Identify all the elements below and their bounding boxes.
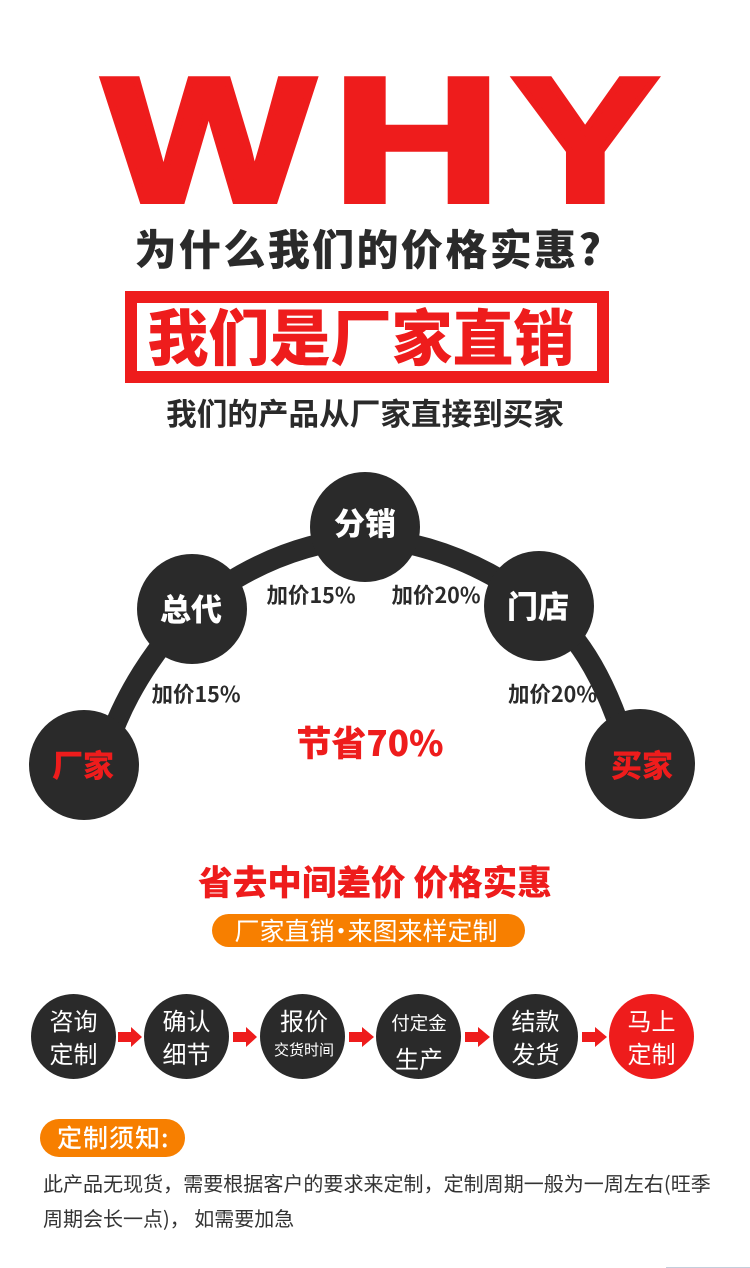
node: general agent (137, 554, 247, 664)
title: WHY: H (332, 41, 501, 239)
node: factory: 厂家 (52, 741, 114, 786)
step: confirm details: 细节 (162, 1035, 210, 1070)
step: confirm details: 确认 (162, 1002, 210, 1037)
node: general agent: 总代 (160, 585, 222, 630)
title: WHY: Y (512, 41, 658, 239)
node: store (484, 551, 594, 661)
arrow (118, 1027, 142, 1047)
heading: why our price is favourable: 为什么我们的价格实惠? (135, 217, 603, 278)
step: customise now (609, 994, 694, 1079)
node: buyer: 买家 (611, 741, 673, 786)
step: customise now: 马上 (628, 1002, 676, 1037)
step: customise now: 定制 (628, 1035, 676, 1070)
notice text (43, 1168, 711, 1232)
notice text: 此产品无现货，需要根据客户的要求来定制，定制周期一般为一周左右(旺季 (43, 1168, 711, 1197)
heading: skip middlemen: 省去中间差价 价格实惠 (198, 855, 552, 905)
arrow (349, 1027, 374, 1047)
subheading: 我们的产品从厂家直接到买家 (166, 390, 564, 434)
step: quote: 交货时间 (274, 1039, 334, 1060)
node: distributor (310, 472, 420, 582)
step: quote (260, 994, 345, 1079)
step: deposit and production: 付定金 (391, 1010, 447, 1036)
label: markup 15%: 加价15% (266, 579, 356, 610)
arc connector (100, 537, 630, 770)
step: pay and ship: 结款 (512, 1002, 560, 1037)
pill: factory direct custom: 厂家直销·来图来样定制 (234, 912, 498, 948)
label: markup 20%: 加价20% (391, 579, 481, 610)
chart: price chain arc (29, 472, 695, 820)
arrow (233, 1027, 257, 1047)
label: markup 15%: 加价15% (151, 678, 241, 709)
step: confirm details (144, 994, 229, 1079)
step: consult: 定制 (50, 1035, 98, 1070)
title: WHY (104, 41, 658, 239)
banner: factory direct sales: 我们是厂家直销 (147, 289, 575, 378)
node: distributor: 分销 (334, 499, 396, 544)
step: pay and ship (493, 994, 578, 1079)
node: store: 门店 (507, 582, 569, 627)
step: pay and ship: 发货 (512, 1035, 560, 1070)
label: save 70%: 节省70% (296, 716, 444, 767)
step: deposit and production: 生产 (395, 1040, 443, 1075)
step: consult: 咨询 (50, 1002, 98, 1037)
label: markup 20%: 加价20% (508, 678, 597, 709)
step: consult (31, 994, 116, 1079)
step: quote: 报价 (280, 1002, 328, 1037)
title: WHY: W (104, 41, 314, 239)
arrow (465, 1027, 490, 1047)
pill: customisation notice: 定制须知: (57, 1119, 169, 1155)
notice text: 周期会长一点)， 如需要加急 (43, 1203, 294, 1232)
step: deposit and production (376, 994, 461, 1079)
node: buyer (585, 709, 695, 819)
arrow (582, 1027, 607, 1047)
node: factory (29, 710, 139, 820)
process flow (31, 994, 694, 1079)
